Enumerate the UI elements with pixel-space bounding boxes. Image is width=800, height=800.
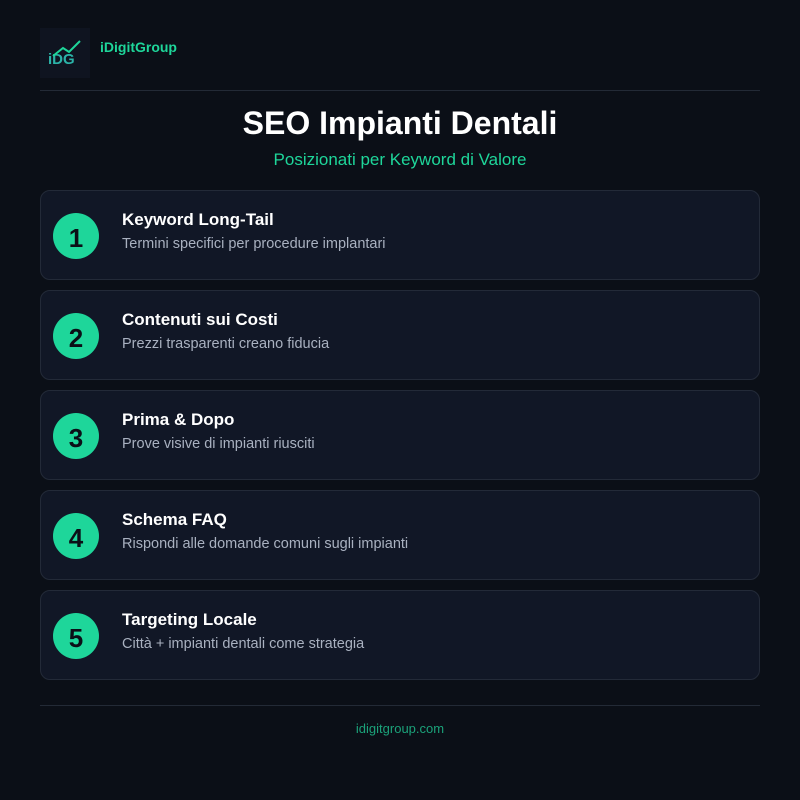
brand name: iDigitGroup: [100, 39, 177, 55]
title: SEO Impianti Dentali: [243, 105, 557, 141]
card 4: 4: [69, 522, 83, 552]
card 5: Targeting Locale: [122, 610, 257, 629]
logo icon: iDG: [48, 51, 75, 68]
card 1: Keyword Long-Tail: [122, 210, 274, 229]
card 5: [40, 590, 760, 680]
card 4: Schema FAQ: [122, 510, 227, 529]
card 4: [40, 490, 760, 580]
card 3: Prima & Dopo: [122, 410, 234, 429]
card 2: Prezzi trasparenti creano fiducia: [122, 336, 329, 352]
footer: idigitgroup.com: [356, 721, 444, 736]
card 1: [40, 190, 760, 280]
card 4: Rispondi alle domande comuni sugli impianti: [122, 536, 408, 552]
card 3: Prove visive di impianti riusciti: [122, 436, 315, 452]
card 2: [40, 290, 760, 380]
card 1: Termini specifici per procedure implantari: [122, 236, 386, 252]
card 3: 3: [69, 422, 83, 452]
logo icon: [40, 28, 90, 78]
card 5: 5: [69, 622, 83, 652]
card 3: [40, 390, 760, 480]
card 2: 2: [69, 322, 83, 352]
card 2: Contenuti sui Costi: [122, 310, 278, 329]
card 5: Città + impianti dentali come strategia: [122, 636, 364, 652]
card 1: 1: [69, 222, 83, 252]
subtitle: Posizionati per Keyword di Valore: [274, 150, 526, 169]
